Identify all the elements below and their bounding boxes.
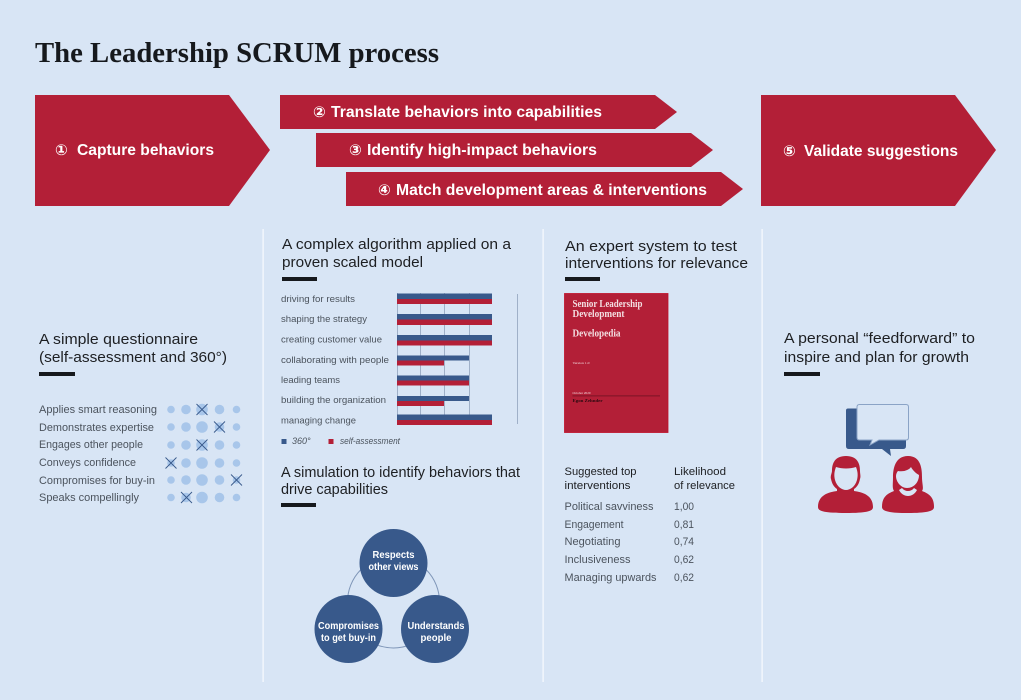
heading: algorithm	[282, 236, 512, 281]
book: Developedia cover	[564, 294, 668, 432]
table: suggested interventions: 0,74	[674, 536, 694, 548]
table: suggested interventions: 0,62	[674, 554, 694, 566]
heading: feedforward: A personal “feedforward” to	[784, 330, 975, 347]
arrow: step 2 translate behaviors: Translate behaviors into capabilities	[331, 104, 602, 121]
table: suggested interventions: 1,00	[674, 501, 694, 513]
heading: simulation: A simulation to identify behaviors that	[281, 464, 521, 481]
arrow: step 5 validate suggestions: ⑤	[783, 142, 796, 160]
table: suggested interventions: 0,81	[674, 519, 694, 531]
icon: female person	[882, 456, 934, 513]
arrow: step 4 match development areas: ④	[378, 181, 391, 199]
heading: algorithm: A complex algorithm applied on a	[282, 236, 512, 253]
text block: capability labels: managing change	[281, 416, 356, 426]
circle: compromises to get buy-in: to get buy-in	[321, 633, 376, 644]
legend: 360°	[292, 436, 311, 446]
arrow: step 1 capture behaviors	[35, 95, 270, 206]
text block: capability labels: collaborating with people	[281, 355, 389, 366]
bar chart: 360 vs self-assessment	[397, 293, 518, 425]
text block: capability labels: leading teams	[281, 375, 340, 386]
panel: algorithm	[281, 236, 521, 663]
circle: respects other views	[360, 529, 428, 597]
heading: expert system	[565, 238, 748, 281]
circle: understands people: people	[420, 633, 452, 644]
heading: questionnaire: A simple questionnaire	[39, 331, 198, 348]
table: suggested interventions: Inclusiveness	[564, 554, 631, 566]
arrow: step 5 validate suggestions	[761, 95, 996, 206]
arrow: step 3 identify behaviors: Identify high-impact behaviors	[367, 142, 597, 159]
heading: questionnaire: (self-assessment and 360°)	[39, 349, 227, 366]
book: Developedia cover: Development	[572, 309, 625, 320]
panel: questionnaire	[39, 331, 242, 504]
table: suggested interventions: Managing upwards	[564, 572, 657, 584]
circle: understands people: Understands	[408, 621, 465, 632]
heading: feedforward: inspire and plan for growth	[784, 349, 969, 366]
arrow: step 4 match development areas	[346, 172, 743, 206]
table: suggested interventions: Likelihood	[674, 466, 726, 478]
text block: behavior labels: Engages other people	[39, 439, 143, 451]
arrow: step 2 translate behaviors: ②	[313, 103, 326, 121]
heading: expert system: interventions for relevance	[565, 255, 748, 272]
heading: expert system: An expert system to test	[565, 238, 738, 255]
text block: capability labels: building the organization	[281, 395, 386, 406]
table: suggested interventions: of relevance	[674, 480, 735, 492]
arrow: step 5 validate suggestions: Validate suggestions	[804, 143, 958, 160]
circle: compromises to get buy-in	[314, 595, 382, 663]
arrow: step 2 translate behaviors	[280, 95, 677, 129]
table: suggested interventions: Negotiating	[564, 536, 620, 548]
icon: speech bubbles	[846, 404, 908, 456]
chart: rating dots	[166, 404, 242, 503]
arrow: step 1 capture behaviors: ①	[55, 141, 68, 159]
table: suggested interventions: interventions	[564, 480, 631, 492]
text block: behavior labels: Compromises for buy-in	[39, 475, 155, 487]
legend	[282, 436, 400, 446]
diagram: three connected behaviors	[314, 529, 469, 663]
heading: questionnaire	[39, 331, 227, 376]
table: suggested interventions	[564, 466, 735, 584]
text block: behavior labels: Demonstrates expertise	[39, 422, 154, 434]
panel: feedforward	[784, 330, 975, 513]
title: The Leadership SCRUM process	[35, 37, 439, 69]
table: suggested interventions: Suggested top	[564, 466, 636, 478]
heading: simulation: drive capabilities	[281, 481, 388, 498]
icon: male person	[818, 456, 873, 513]
text block: capability labels: creating customer value	[281, 334, 382, 346]
heading: simulation	[281, 464, 521, 507]
circle: compromises to get buy-in: Compromises	[318, 621, 379, 632]
text block: capability labels: shaping the strategy	[281, 314, 367, 325]
table: suggested interventions: Engagement	[564, 519, 624, 531]
heading: algorithm: proven scaled model	[282, 254, 423, 271]
book: Developedia cover: October 2020	[572, 391, 591, 395]
text block: behavior labels: Applies smart reasoning	[39, 404, 157, 416]
circle: respects other views: Respects	[372, 550, 415, 561]
table: suggested interventions: Political savviness	[564, 501, 654, 513]
arrow: step 3 identify behaviors: ③	[349, 141, 362, 159]
panel: expert system	[564, 238, 748, 584]
text block: behavior labels: Speaks compellingly	[39, 492, 139, 504]
text block: capability labels: driving for results	[281, 294, 355, 305]
arrow: step 4 match development areas: Match development areas & interventions	[396, 182, 707, 199]
book: Developedia cover: Version 1.0	[572, 361, 590, 365]
text block: behavior labels	[39, 404, 157, 504]
book: Developedia cover: Senior Leadership	[572, 299, 643, 310]
table: suggested interventions: 0,62	[674, 572, 694, 584]
arrow: step 3 identify behaviors	[316, 133, 713, 167]
book: Developedia cover: Egon Zehnder	[572, 398, 603, 403]
circle: understands people	[401, 595, 469, 663]
legend: self-assessment	[340, 436, 400, 446]
book: Developedia cover: Developedia	[572, 328, 620, 340]
arrow: step 1 capture behaviors: Capture behaviors	[77, 142, 214, 159]
text block: behavior labels: Conveys confidence	[39, 457, 136, 469]
circle: respects other views: other views	[368, 562, 419, 573]
heading: feedforward	[784, 330, 975, 376]
text block: capability labels	[281, 294, 389, 426]
